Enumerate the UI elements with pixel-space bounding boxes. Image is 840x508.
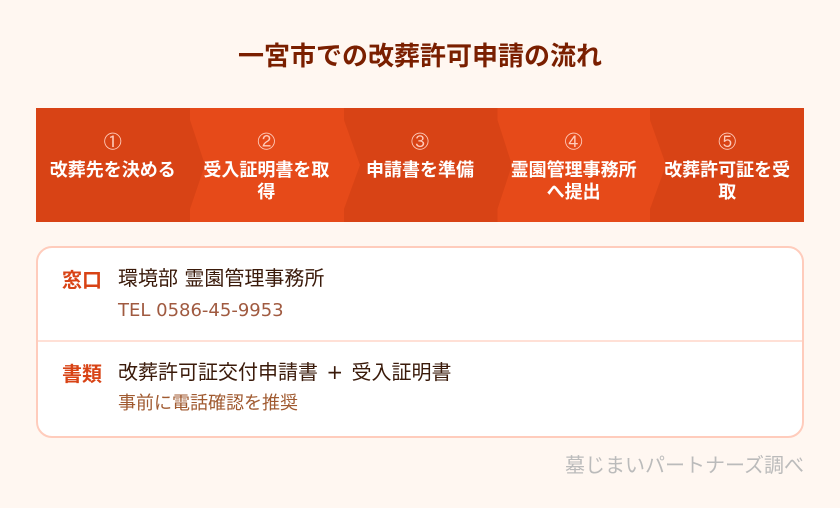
row: documents note: 事前に電話確認を推奨	[118, 393, 298, 414]
step 3: ③	[411, 133, 429, 151]
step 1	[50, 132, 176, 181]
row: documents label: 書類	[62, 362, 102, 386]
step 1: ①	[104, 133, 122, 151]
row: documents name: 改葬許可証交付申請書 + 受入証明書	[118, 360, 451, 384]
step 2: ②	[257, 133, 275, 151]
title: 一宮市での改葬許可申請の流れ	[238, 42, 602, 72]
step 4: ④	[565, 133, 583, 151]
step 1: 改葬先を決める	[50, 160, 176, 181]
panel: process steps	[36, 108, 804, 222]
row: contact name: 環境部 霊園管理事務所	[118, 266, 324, 290]
row: contact phone: TEL 0586-45-9953	[118, 300, 284, 321]
step 5	[664, 132, 790, 203]
step 3	[366, 132, 474, 181]
row: contact label: 窓口	[62, 268, 102, 292]
step 2: 受入証明書を取得	[203, 160, 329, 203]
step 4: 霊園管理事務所へ提出	[511, 160, 637, 203]
step 4	[511, 132, 637, 203]
source note: 墓じまいパートナーズ調べ	[565, 453, 804, 477]
panel: details card	[36, 246, 804, 438]
step 2	[203, 132, 329, 203]
step 5: 改葬許可証を受取	[664, 160, 790, 203]
step bands	[190, 108, 666, 222]
step 3: 申請書を準備	[366, 160, 474, 181]
divider	[38, 340, 802, 342]
step 5: ⑤	[718, 133, 736, 151]
